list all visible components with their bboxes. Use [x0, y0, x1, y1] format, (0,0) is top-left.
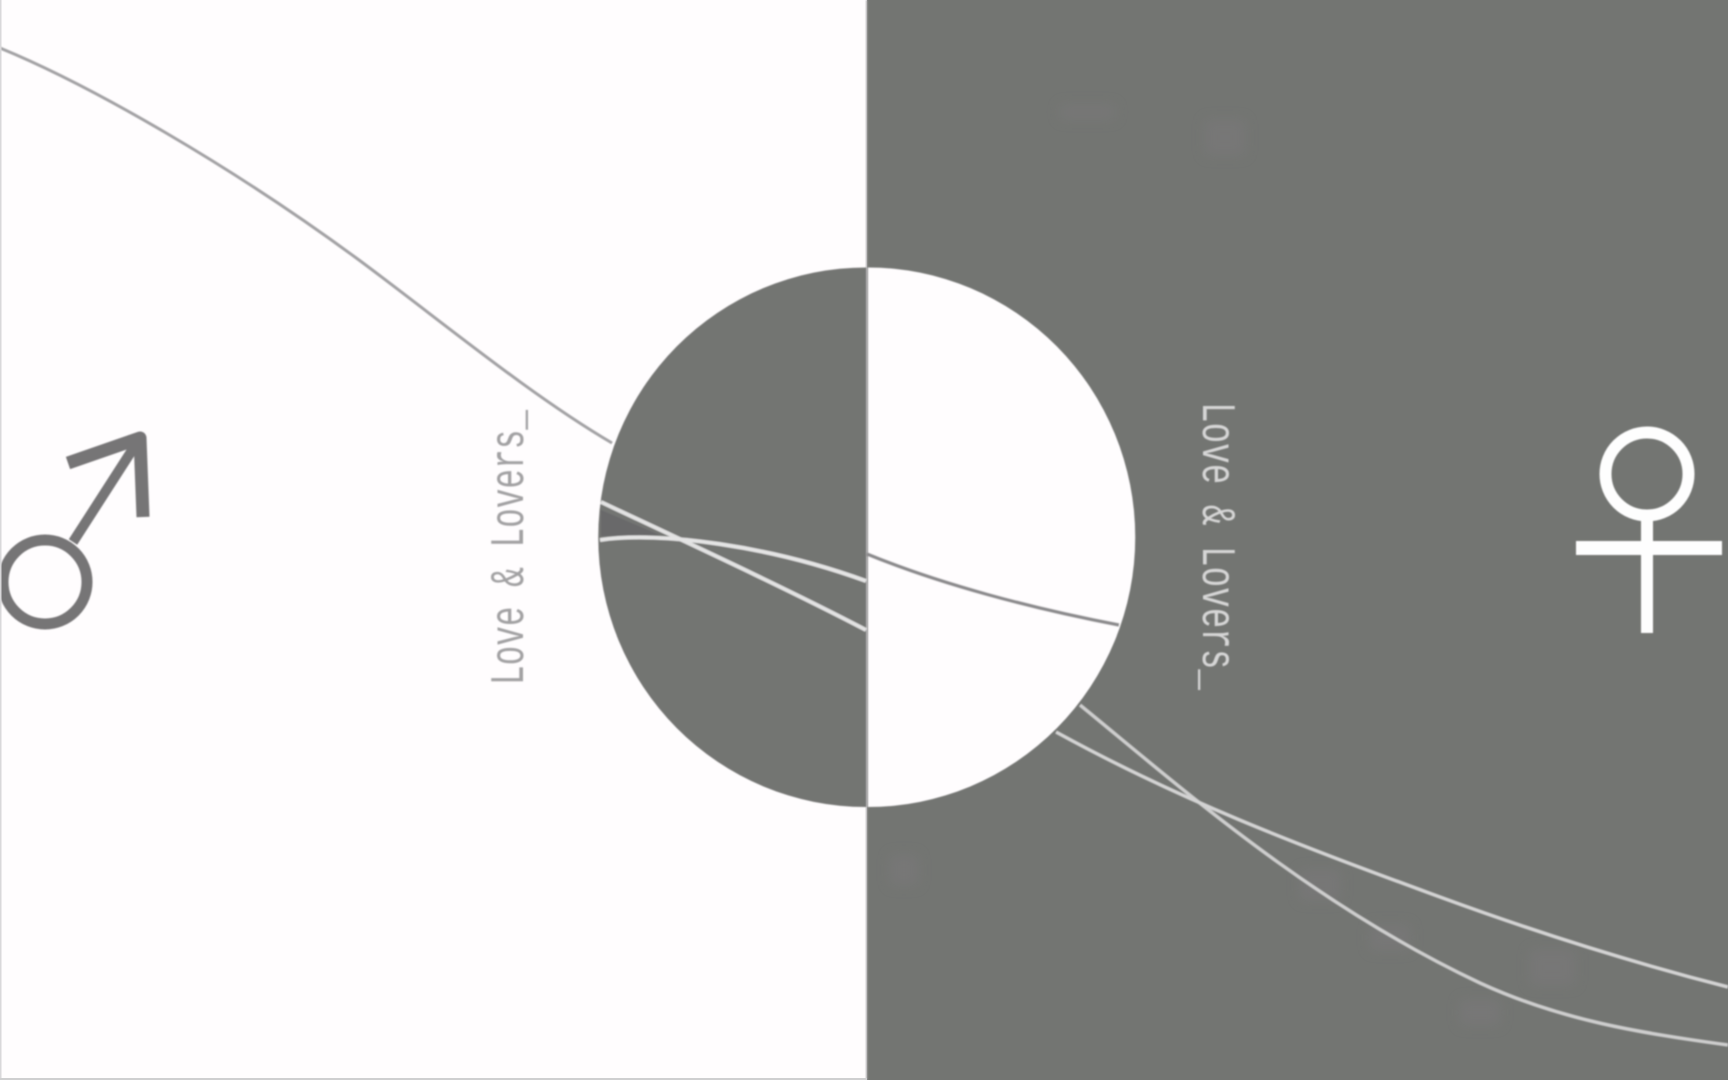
curve: light line C on grey panel — [1080, 705, 1728, 1045]
center divider — [866, 0, 868, 1080]
icon: male symbol — [3, 438, 143, 624]
curve: light line A in grey semicircle — [601, 502, 866, 630]
curve: light line B in grey semicircle — [600, 537, 866, 581]
left page edge — [0, 0, 2, 1080]
circle left half: grey semicircle — [598, 268, 866, 807]
text: left label: Love & Lovers_ — [484, 410, 538, 685]
panel: grey right half — [867, 0, 1728, 1080]
panel: white left half — [0, 0, 867, 1080]
text: right label: Love & Lovers_ — [1188, 402, 1242, 690]
icon: female symbol — [1576, 432, 1722, 633]
bottom page edge — [0, 1078, 867, 1080]
curve: grey line across white panel — [0, 48, 612, 443]
circle right half: white semicircle — [868, 268, 1135, 807]
shaded wedge inside circle — [601, 510, 660, 536]
curve: grey line in white semicircle — [867, 554, 1119, 625]
curve: light line D on grey panel — [1056, 732, 1728, 987]
compression blotches on grey panel — [890, 105, 1575, 1025]
